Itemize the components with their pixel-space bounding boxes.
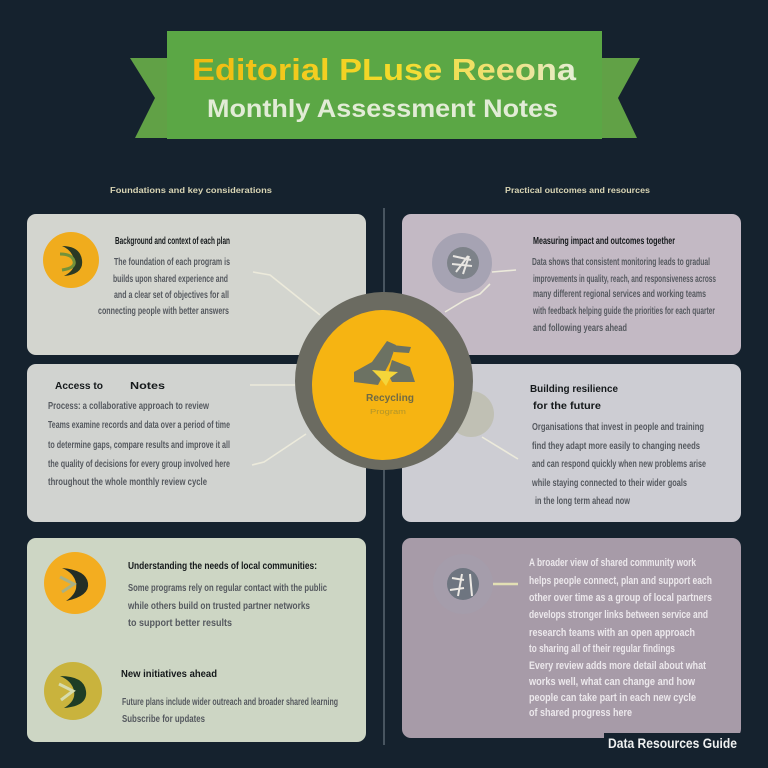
title: Editorial PLuse Reeona <box>192 52 577 87</box>
badge caption: Recycling <box>366 393 414 404</box>
body text: Organisations that invest in people and training <box>532 422 704 433</box>
body text: Subscribe for updates <box>122 714 205 725</box>
body text <box>48 401 230 488</box>
body text: people can take part in each new cycle <box>529 692 696 704</box>
badge caption: Program <box>370 409 406 416</box>
badge caption <box>366 393 414 416</box>
panel: top right <box>402 214 741 355</box>
body text: Process: a collaborative approach to review <box>48 401 209 412</box>
body text: builds upon shared experience and <box>113 274 228 285</box>
body text: and can respond quickly when new problems arise <box>532 459 706 470</box>
body text: works well, what can change and how <box>528 676 695 688</box>
panel: middle left <box>27 364 366 522</box>
body text: Future plans include wider outreach and broader shared learning <box>122 697 338 708</box>
body text: Every review adds more detail about what <box>529 660 706 672</box>
body text <box>532 257 716 334</box>
icon: top left badge <box>43 232 99 288</box>
title banner <box>130 31 640 139</box>
body text: The foundation of each program is <box>114 257 230 268</box>
body text: of shared progress here <box>529 707 632 719</box>
body text: to determine gaps, compare results and improve it all <box>48 440 230 451</box>
body text: Teams examine records and data over a period of time <box>48 420 230 431</box>
body text: throughout the whole monthly review cycle <box>48 477 207 488</box>
panel: middle right <box>402 364 741 522</box>
heading: Understanding the needs of local communities: <box>128 561 317 572</box>
heading <box>530 384 618 412</box>
heading: Access to <box>55 381 103 392</box>
body text <box>127 583 327 629</box>
body text: A broader view of shared community work <box>529 557 697 569</box>
panel: bottom left <box>27 538 366 742</box>
body text: in the long term ahead now <box>535 496 630 507</box>
body text: helps people connect, plan and support each <box>529 575 712 587</box>
icon: bottom right badge <box>433 554 493 614</box>
connector lines <box>250 270 518 584</box>
heading: Notes <box>130 381 166 392</box>
body text: find they adapt more easily to changing needs <box>532 441 700 452</box>
heading: Background and context of each plan <box>115 236 230 247</box>
body text: Some programs rely on regular contact with the public <box>128 583 327 594</box>
panel: top left <box>27 214 366 355</box>
body text: to support better results <box>128 618 232 629</box>
body text: develops stronger links between service and <box>529 609 708 621</box>
heading: Building resilience <box>530 384 618 395</box>
heading <box>55 381 166 392</box>
icon: bottom left upper badge <box>44 552 106 614</box>
subtitle: Monthly Assessment Notes <box>207 95 558 123</box>
heading: New initiatives ahead <box>121 669 217 680</box>
body text <box>98 257 230 317</box>
body text: other over time as a group of local partners <box>529 592 712 604</box>
icon: top right badge <box>432 233 492 293</box>
body text: while others build on trusted partner networks <box>127 601 310 612</box>
body text <box>122 697 338 725</box>
section label: right: Practical outcomes and resources <box>505 186 651 195</box>
body text: and following years ahead <box>533 323 627 334</box>
heading: for the future <box>533 401 601 412</box>
body text <box>528 557 712 719</box>
body text: while staying connected to their wider goals <box>531 478 687 489</box>
body text: the quality of decisions for every group involved here <box>48 459 230 470</box>
body text: and a clear set of objectives for all <box>114 290 229 301</box>
body text: connecting people with better answers <box>98 306 229 317</box>
central badge <box>295 292 473 470</box>
footer credit: Data Resources Guide <box>608 735 737 751</box>
icon: central recycling symbol <box>354 341 415 386</box>
section label: left: Foundations and key considerations <box>110 186 273 195</box>
body text: to sharing all of their regular findings <box>529 643 675 655</box>
icon: middle right partial badge <box>448 391 494 437</box>
panel: bottom right <box>402 538 741 738</box>
heading: Measuring impact and outcomes together <box>533 236 675 247</box>
icon: bottom left lower badge <box>44 662 102 720</box>
body text <box>531 422 706 507</box>
body text: research teams with an open approach <box>529 627 695 639</box>
